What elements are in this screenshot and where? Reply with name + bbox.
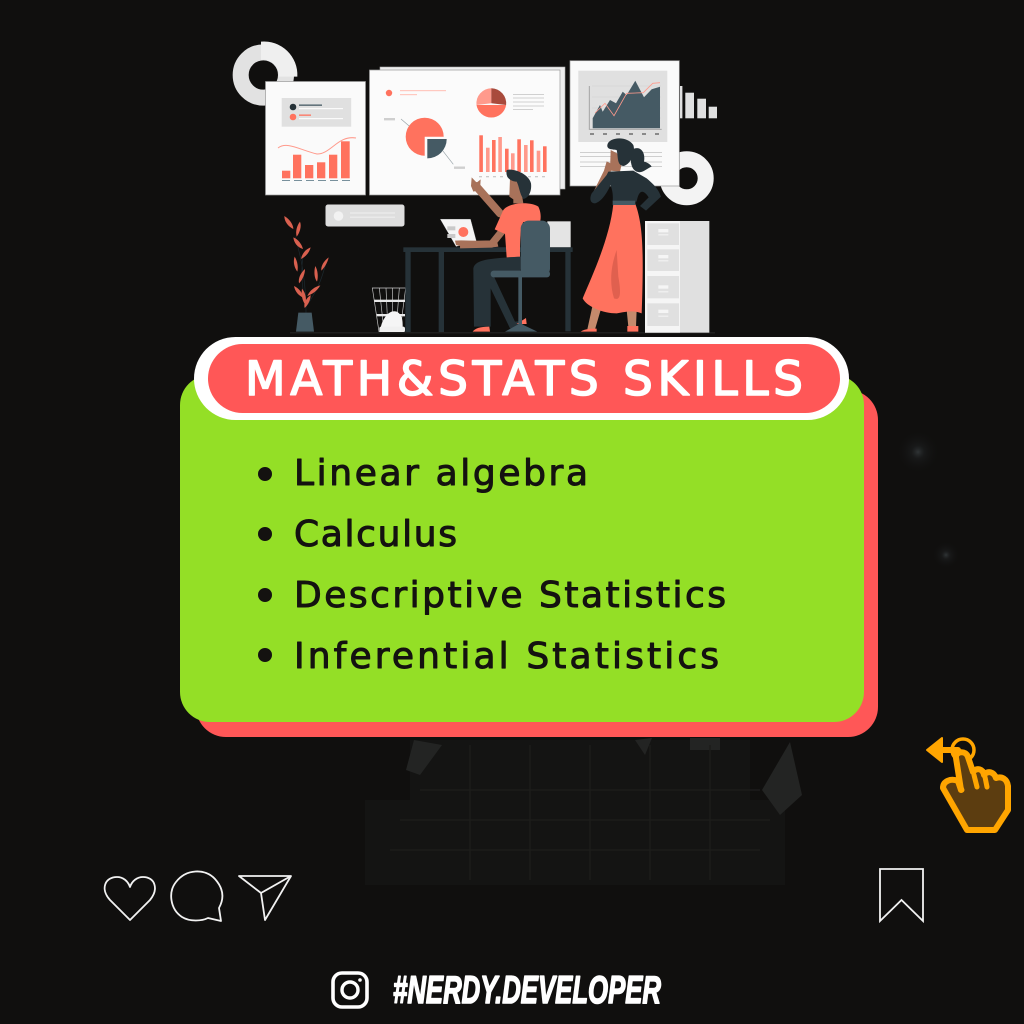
background: faint scenery bbox=[365, 430, 960, 885]
illustration: filing cabinet bbox=[645, 221, 709, 333]
skills list: Descriptive Statistics bbox=[294, 575, 726, 616]
icon: instagram bbox=[333, 973, 367, 1007]
illustration: ground line bbox=[290, 332, 715, 334]
illustration: waste basket bbox=[372, 288, 406, 332]
panel: skills card bbox=[180, 375, 878, 737]
hashtag text: #NERDY.DEVELOPER bbox=[393, 969, 661, 1012]
illustration: donut chart right bbox=[668, 159, 706, 197]
icon: comment bubble bbox=[171, 871, 222, 921]
illustration: bar chart right bbox=[680, 86, 717, 118]
illustration: donut chart left bbox=[241, 42, 297, 98]
illustration: potted plant bbox=[284, 216, 329, 332]
illustration: notification card bbox=[326, 204, 404, 226]
panel: right area chart card bbox=[570, 61, 679, 186]
skills list bbox=[258, 453, 726, 677]
illustration: seated man bbox=[460, 170, 550, 332]
icon: send arrow bbox=[239, 876, 291, 920]
illustration: standing woman bbox=[581, 138, 661, 332]
title banner: MATH&STATS SKILLS bbox=[245, 352, 803, 407]
title banner bbox=[194, 337, 849, 420]
skills list: Calculus bbox=[294, 514, 457, 555]
icon: bookmark bbox=[880, 869, 923, 921]
card shadow bbox=[196, 390, 878, 737]
skills list: Inferential Statistics bbox=[294, 636, 719, 677]
panel: left chart card bbox=[266, 82, 366, 195]
panel: middle chart board bbox=[370, 67, 565, 195]
icon: swipe hand bbox=[927, 738, 1008, 830]
illustration: desk and laptop bbox=[403, 219, 573, 332]
card face bbox=[180, 375, 864, 722]
illustration: office analytics scene bbox=[241, 42, 717, 333]
skills list: Linear algebra bbox=[294, 453, 588, 494]
icon: heart bbox=[105, 877, 155, 920]
